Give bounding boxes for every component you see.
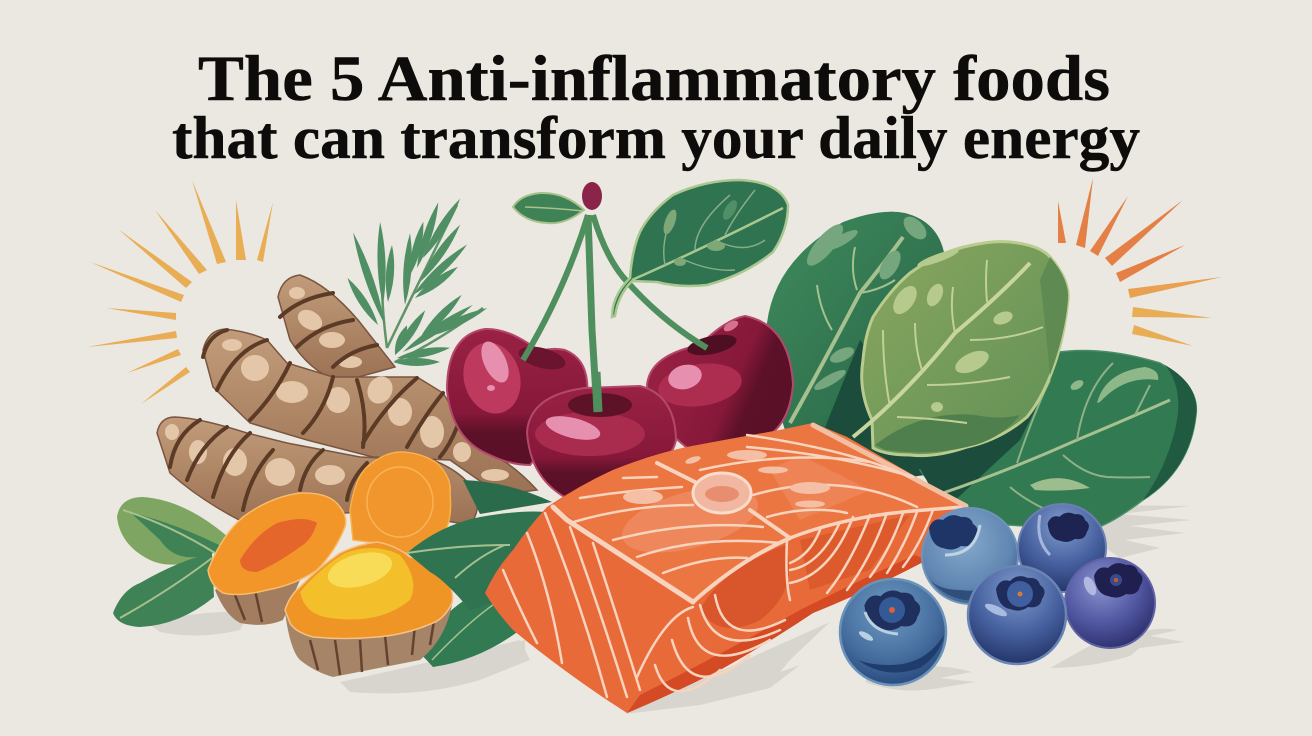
- middle leaf: [853, 242, 1068, 456]
- lower edge shade: [627, 555, 927, 713]
- root rings: [170, 293, 457, 510]
- lower root: [157, 417, 478, 525]
- leaf over turmeric: [407, 512, 545, 610]
- highlights: [623, 450, 830, 508]
- blueberry top left: [922, 508, 1018, 604]
- title: that can transform your daily energy: [172, 105, 1140, 171]
- large leaf: [612, 180, 788, 317]
- cherry: left: [447, 329, 587, 465]
- yellow piece: [285, 542, 453, 677]
- turmeric roots: [113, 275, 537, 627]
- fat lines: [503, 425, 966, 697]
- blueberry front: [840, 579, 946, 685]
- stem knob: [582, 182, 602, 210]
- title: [172, 43, 1140, 171]
- salmon fillet: [485, 423, 968, 713]
- middle root: [203, 329, 537, 495]
- shadows under food: [150, 505, 1192, 714]
- cut turmeric pieces: [208, 452, 545, 677]
- blueberry top right: [1018, 504, 1106, 592]
- spinach leaves: [767, 212, 1196, 530]
- herb sprig: [344, 197, 489, 366]
- back leaf: [767, 212, 960, 480]
- icon: left sun rays: [87, 180, 273, 404]
- title: The 5 Anti-inflammatory foods: [198, 43, 1110, 115]
- fillet body: [485, 423, 968, 713]
- back orange piece: [350, 452, 451, 553]
- cherry: centre: [527, 372, 676, 500]
- root texture: [165, 287, 509, 486]
- upper root: [278, 275, 395, 382]
- skin spot: [693, 473, 751, 513]
- blueberry centre: [968, 566, 1066, 664]
- cherries with stems: [447, 180, 793, 500]
- lower leaf beside turmeric: [420, 480, 552, 667]
- blueberry right: [1065, 558, 1155, 648]
- right leaf: [915, 351, 1196, 530]
- blueberries: [840, 504, 1155, 685]
- cherry: right: [647, 316, 793, 450]
- stems: [523, 215, 707, 412]
- small leaf: [513, 193, 584, 223]
- left leaves: [113, 497, 228, 627]
- icon: right sun rays: [1058, 178, 1222, 346]
- left orange piece: [208, 493, 346, 625]
- top face: [553, 423, 968, 603]
